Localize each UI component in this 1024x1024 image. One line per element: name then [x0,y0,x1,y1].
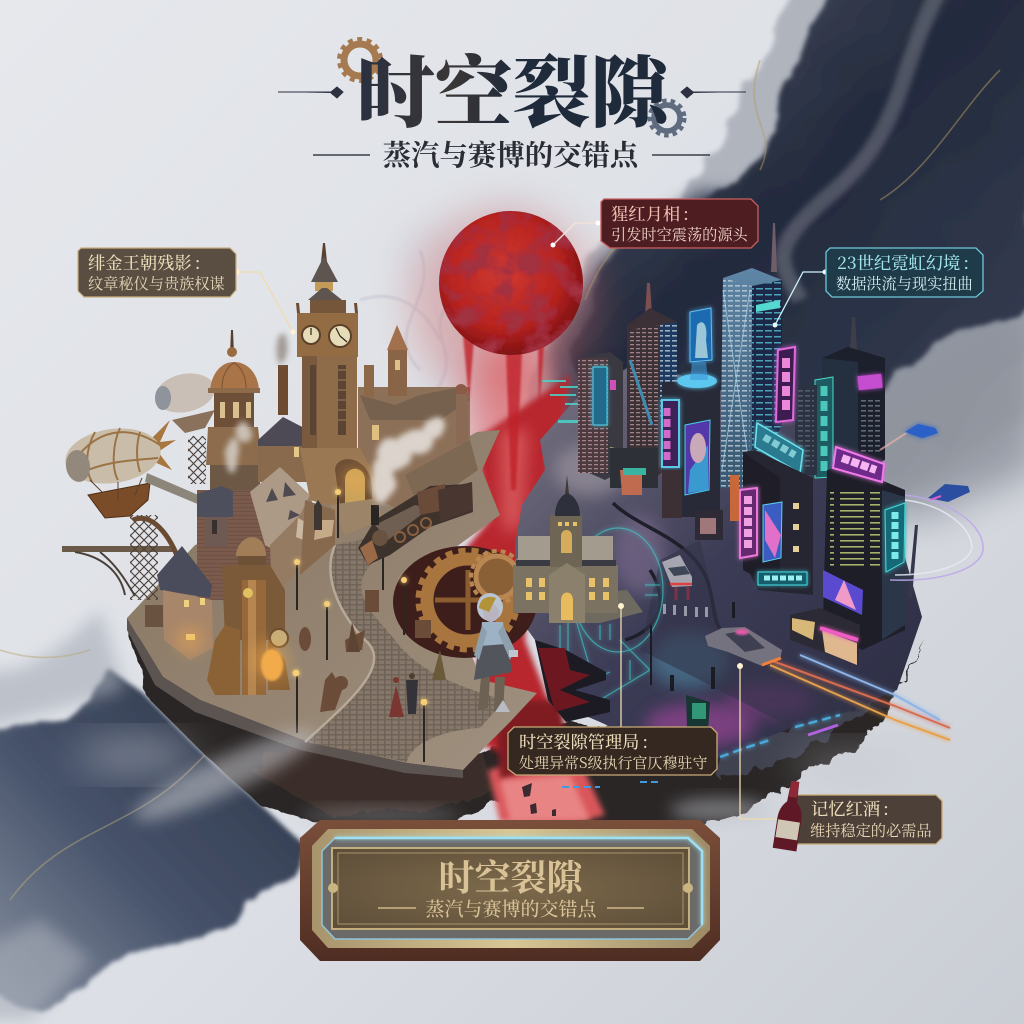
sign: teal billboard [755,423,803,473]
tower: hologram base [662,308,720,518]
chimney smoke [224,334,289,473]
left island surface [127,430,537,778]
crates and townsfolk [299,500,446,717]
chimney [278,365,288,415]
mist around the island [75,716,910,834]
bureau building [513,475,643,623]
slate roof house [258,417,313,482]
ground car [662,555,692,600]
callout: Feijin dynasty: 纹章秘仪与贵族权谋 [88,273,225,294]
flying car lower [928,484,970,502]
callout: blood moon: 猩红月相: [611,200,689,225]
callout: rift bureau: 时空裂隙管理局: [519,728,648,753]
foreground tower one [730,450,813,595]
island: rock underside [127,625,925,832]
title text: 时空裂隙 [356,31,675,143]
callout: rift bureau [508,603,717,775]
cyber city [578,223,983,740]
steampunk quarter [62,243,478,762]
subtitle rules [313,154,710,156]
ink wash: top right [360,0,1024,520]
teal circuit traces [560,528,663,700]
brick town house [197,486,273,600]
flying car upper [880,424,938,450]
stone edge [127,618,463,778]
circuit cliffs [535,640,610,722]
callout: neon realm: 23世纪霓虹幻境: [837,249,969,274]
clock tower [296,243,382,535]
callout: blood moon [550,199,758,248]
title group [278,31,746,174]
callout: Feijin dynasty [78,248,296,334]
fissure glow beneath the island [488,750,605,825]
icon: steel gear [650,100,684,136]
plaque subtitle: 蒸汽与赛博的交错点 [425,894,597,922]
steam locomotive [358,482,473,565]
falling debris [522,783,556,816]
icon: copper gear [339,39,381,81]
plaque title: 时空裂隙 [438,850,585,901]
locomotive steam [371,418,448,504]
sign: pink vertical [776,347,795,422]
icon: wine bottle [773,780,807,851]
right island surface [515,360,922,787]
title ornament: right line [681,87,746,98]
crack: red rift between worlds [430,375,590,822]
street pedestrians [650,602,735,732]
left cottage [145,546,213,660]
tower: brown [627,283,677,478]
curved road edge [613,503,730,640]
tower: small left [578,352,653,480]
tower: tall glass [720,223,782,490]
callout: memory wine: 维持稳定的必需品 [810,820,932,841]
title ornament: left line [278,87,343,98]
street shop [790,608,860,665]
plaque rivets [328,883,693,893]
moon glow [410,210,600,530]
tower: dark rear right [795,317,885,480]
energy rings [890,495,983,580]
lamp-glow accents [178,468,367,678]
callout: memory wine [737,663,942,851]
callout: neon realm [772,248,983,328]
antenna [908,525,918,598]
callout: memory wine: 记忆红酒: [811,795,889,820]
callout: Feijin dynasty: 绯金王朝残影: [88,249,200,274]
character: girl at the rift edge [474,593,518,712]
subtitle text: 蒸汽与赛博的交错点 [383,133,640,174]
light trails [770,655,950,740]
airship large [62,420,176,518]
boiler clock tower [207,537,290,695]
callout: rift bureau: 处理异常S级执行官仄穆驻守 [519,752,708,773]
shopfront between towers [610,448,723,540]
right terrace houses [358,325,478,510]
callout: blood moon: 引发时空震荡的源头 [611,224,748,245]
neon strip on lower edge [720,715,840,757]
callout: neon realm: 数据洪流与现实扭曲 [836,273,973,294]
iron trestles and bridge [62,436,206,600]
ink wash: bottom left [0,610,300,1020]
plaque ornaments [378,907,644,909]
big clockwork gears [393,546,537,658]
data fragments over the rift [542,380,595,423]
domed observatory [206,330,262,495]
crosswalk [663,604,708,617]
plaque [300,820,720,961]
cobblestone road [305,528,505,762]
moon with drips [439,211,583,490]
foreground tower two [790,447,905,665]
main square lamps [297,492,424,762]
airship small [152,368,218,433]
gabled roof hall [250,467,335,600]
sports car [705,627,782,666]
road surface [640,540,890,727]
clock faces [302,325,351,347]
